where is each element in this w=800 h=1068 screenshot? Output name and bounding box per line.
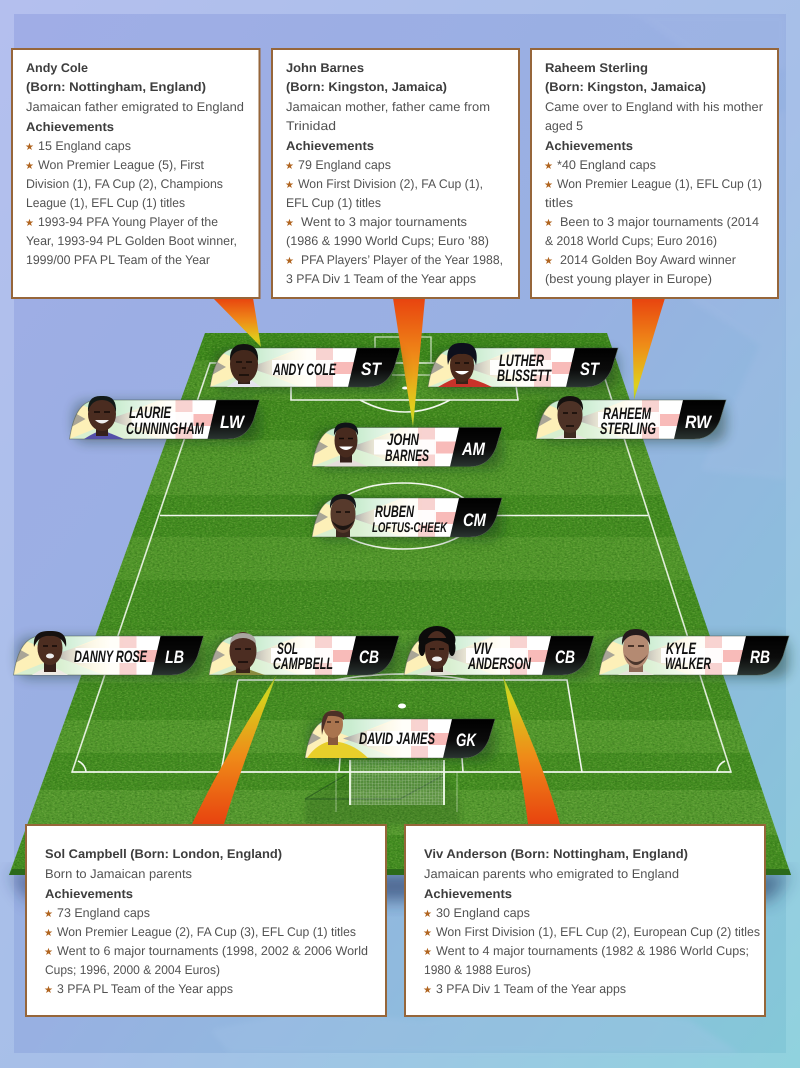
panel: Sol Campbell: ★ <box>44 985 53 996</box>
panel: Andy Cole: Achievements <box>26 120 114 134</box>
player card: John Barnes, AM <box>312 422 502 466</box>
photo: Laurie Cunningham <box>84 396 124 439</box>
panel: Viv Anderson: ★ <box>423 909 432 920</box>
panel: John Barnes: Achievements <box>286 139 374 153</box>
panel: John Barnes: EFL Cup (1) titles <box>286 196 381 210</box>
panel: Raheem Sterling: (Born: Kingston, Jamaica) <box>545 80 706 94</box>
card shadows <box>18 350 789 761</box>
photo: David James <box>307 710 368 758</box>
panel: John Barnes: PFA Players’ Player of the Year 1988, <box>301 253 503 267</box>
panel: Raheem Sterling: ★ <box>544 180 553 191</box>
panel: Raheem Sterling: Been to 3 major tournaments (2014 <box>560 215 759 229</box>
panel: Sol Campbell: Went to 6 major tournaments (1998, 2002 & 2006 World <box>57 944 368 958</box>
panel: Raheem Sterling: Won Premier League (1), EFL Cup (1) <box>557 177 762 191</box>
panel: Raheem Sterling <box>531 49 778 298</box>
player card: Andy Cole, ST: ST <box>361 359 383 379</box>
player card: Kyle Walker, RB: WALKER <box>665 655 711 673</box>
player card: Danny Rose, LB: LB <box>165 647 184 667</box>
player card: Sol Campbell, CB: CAMPBELL <box>273 655 333 673</box>
pointer: Viv Anderson <box>503 676 560 824</box>
panel: Viv Anderson: Viv Anderson (Born: Nottingham, England) <box>424 847 688 861</box>
panel: Andy Cole: 15 England caps <box>38 139 131 153</box>
panel: Raheem Sterling: aged 5 <box>545 119 583 133</box>
photo: Ruben Loftus-Cheek <box>330 494 356 537</box>
panel: John Barnes: ★ <box>285 180 294 191</box>
player card: Viv Anderson, CB: VIV <box>473 640 493 658</box>
panel: Raheem Sterling: Achievements <box>545 139 633 153</box>
panel: Sol Campbell <box>26 825 386 1016</box>
photo: Andy Cole <box>227 344 261 387</box>
panel: Sol Campbell: ★ <box>44 909 53 920</box>
panel: Raheem Sterling: & 2018 World Cups; Euro 2016) <box>545 234 717 248</box>
panel: Andy Cole: Year, 1993-94 PL Golden Boot winner, <box>26 234 237 248</box>
panel: Sol Campbell: ★ <box>44 947 53 958</box>
panel: Viv Anderson: ★ <box>423 928 432 939</box>
player card: Andy Cole, ST <box>210 344 400 387</box>
panel: John Barnes: (Born: Kingston, Jamaica) <box>286 80 447 94</box>
panel: John Barnes <box>272 49 519 298</box>
panel: John Barnes: 79 England caps <box>298 158 391 172</box>
panel: Viv Anderson <box>405 825 765 1016</box>
panel: Andy Cole: Won Premier League (5), First <box>38 158 205 172</box>
panel: John Barnes: Trinidad <box>286 119 336 133</box>
photo: Raheem Sterling <box>553 396 587 439</box>
player card: Sol Campbell, CB: CB <box>359 647 379 667</box>
panel: Andy Cole: Jamaican father emigrated to England <box>26 100 244 114</box>
bottom goal and net <box>72 760 731 825</box>
panel: Viv Anderson: 1980 & 1988 Euros) <box>424 963 531 977</box>
player card: David James, GK: GK <box>456 730 477 750</box>
panel: Viv Anderson: Achievements <box>424 887 512 901</box>
panel: Andy Cole <box>12 49 260 298</box>
player card: Raheem Sterling, RW: RW <box>685 412 713 432</box>
panel: Raheem Sterling: Raheem Sterling <box>545 61 648 75</box>
player card: John Barnes, AM: JOHN <box>387 431 420 449</box>
player card: Luther Blissett, ST: LUTHER <box>499 352 544 370</box>
panel: Raheem Sterling: titles <box>545 196 573 210</box>
player card: Raheem Sterling, RW: STERLING <box>600 420 656 438</box>
panel: John Barnes: ★ <box>285 256 294 267</box>
photo: Viv Anderson <box>417 626 457 675</box>
panel: Andy Cole: Division (1), FA Cup (2), Champions <box>26 177 223 191</box>
player card: Luther Blissett, ST: ST <box>580 359 601 379</box>
photo: Sol Campbell <box>221 632 265 675</box>
football pitch <box>0 333 800 900</box>
pointer: Sol Campbell <box>192 676 276 824</box>
panel: Andy Cole: League (1), EFL Cup (1) titles <box>26 196 185 210</box>
player card: Kyle Walker, RB: KYLE <box>666 640 697 658</box>
panel: Andy Cole: ★ <box>25 218 34 229</box>
panel: John Barnes: Won First Division (2), FA Cup (1), <box>298 177 483 191</box>
player card: Ruben Loftus-Cheek, CM <box>312 494 502 537</box>
panel: Sol Campbell: Born to Jamaican parents <box>45 867 192 881</box>
panel: Andy Cole: 1999/00 PFA PL Team of the Year <box>26 253 210 267</box>
panel: Raheem Sterling: ★ <box>544 161 553 172</box>
top goal <box>375 337 432 375</box>
panel: Raheem Sterling: (best young player in Europe) <box>545 272 712 286</box>
panel: Andy Cole: 1993-94 PFA Young Player of the <box>38 215 218 229</box>
photo: John Barnes <box>324 422 368 466</box>
player card: Sol Campbell, CB <box>209 632 399 675</box>
panel: Sol Campbell: Cups; 1996, 2000 & 2004 Euros) <box>45 963 220 977</box>
panel: Sol Campbell: ★ <box>44 928 53 939</box>
panel: John Barnes: ★ <box>285 161 294 172</box>
pointer: Raheem Sterling <box>632 298 665 400</box>
pointer: Andy Cole <box>213 298 261 347</box>
panel: Raheem Sterling: Came over to England with his mother <box>545 100 763 114</box>
panel: John Barnes: (1986 & 1990 World Cups; Euro ’88) <box>286 234 489 248</box>
panel: John Barnes: 3 PFA Div 1 Team of the Year apps <box>286 272 476 286</box>
player card: Luther Blissett, ST: BLISSETT <box>497 367 552 385</box>
panel: Andy Cole: ★ <box>25 142 34 153</box>
panel: Andy Cole: (Born: Nottingham, England) <box>26 80 206 94</box>
panel: John Barnes: Jamaican mother, father came from <box>286 100 490 114</box>
panel: Viv Anderson: ★ <box>423 985 432 996</box>
panel: Sol Campbell: Sol Campbell (Born: London, England) <box>45 847 282 861</box>
player card: Raheem Sterling, RW <box>536 396 726 439</box>
player card: Laurie Cunningham, LW: LW <box>220 412 246 432</box>
panel: John Barnes: ★ <box>285 218 294 229</box>
panel: Sol Campbell: 73 England caps <box>57 906 150 920</box>
player card: Danny Rose, LB: DANNY ROSE <box>74 648 148 666</box>
pitch markings <box>72 363 731 772</box>
panel: Raheem Sterling: ★ <box>544 218 553 229</box>
pointer: John Barnes <box>393 298 425 427</box>
panel: Raheem Sterling: ★ <box>544 256 553 267</box>
player card: Ruben Loftus-Cheek, CM: CM <box>463 510 487 530</box>
photo: Kyle Walker <box>618 629 654 675</box>
player card: Ruben Loftus-Cheek, CM: RUBEN <box>375 503 415 521</box>
player card: John Barnes, AM: AM <box>461 439 486 459</box>
player card: Laurie Cunningham, LW: CUNNINGHAM <box>126 420 205 438</box>
player card: Viv Anderson, CB <box>404 626 594 675</box>
player card: David James, GK: DAVID JAMES <box>359 730 435 748</box>
panel: Sol Campbell: Won Premier League (2), FA Cup (3), EFL Cup (1) titles <box>57 925 356 939</box>
panel: Raheem Sterling: *40 England caps <box>557 158 656 172</box>
panel: John Barnes: John Barnes <box>286 61 364 75</box>
player card: Luther Blissett, ST <box>428 343 618 387</box>
player card: Danny Rose, LB <box>14 631 204 675</box>
player card: Kyle Walker, RB: RB <box>750 647 770 667</box>
panel: Viv Anderson: 3 PFA Div 1 Team of the Year apps <box>436 982 626 996</box>
panel: Viv Anderson: 30 England caps <box>436 906 530 920</box>
player card: John Barnes, AM: BARNES <box>385 447 429 465</box>
player card: Viv Anderson, CB: ANDERSON <box>467 655 532 673</box>
player card: Andy Cole, ST: ANDY COLE <box>272 361 337 379</box>
player card: Raheem Sterling, RW: RAHEEM <box>603 405 652 423</box>
player card: Viv Anderson, CB: CB <box>555 647 575 667</box>
player card: Laurie Cunningham, LW <box>70 396 260 439</box>
panel: John Barnes: Went to 3 major tournaments <box>301 215 467 229</box>
panel: Viv Anderson: Went to 4 major tournaments (1982 & 1986 World Cups; <box>436 944 749 958</box>
panel: Andy Cole: Andy Cole <box>26 61 88 75</box>
player card: Kyle Walker, RB <box>599 629 789 675</box>
panel: Viv Anderson: ★ <box>423 947 432 958</box>
panel: Sol Campbell: 3 PFA PL Team of the Year apps <box>57 982 233 996</box>
panel: Sol Campbell: Achievements <box>45 887 133 901</box>
panel: Raheem Sterling: 2014 Golden Boy Award winner <box>560 253 736 267</box>
photo: Danny Rose <box>32 631 68 675</box>
player card: Ruben Loftus-Cheek, CM: LOFTUS-CHEEK <box>372 519 448 535</box>
player card: Sol Campbell, CB: SOL <box>277 640 298 658</box>
panel: Andy Cole: ★ <box>25 161 34 172</box>
panel: Viv Anderson: Jamaican parents who emigrated to England <box>424 867 679 881</box>
panel: Viv Anderson: Won First Division (1), EFL Cup (2), European Cup (2) titles <box>436 925 760 939</box>
photo: Luther Blissett <box>438 343 492 387</box>
player card: Laurie Cunningham, LW: LAURIE <box>129 404 172 422</box>
player card: David James, GK <box>305 710 495 758</box>
